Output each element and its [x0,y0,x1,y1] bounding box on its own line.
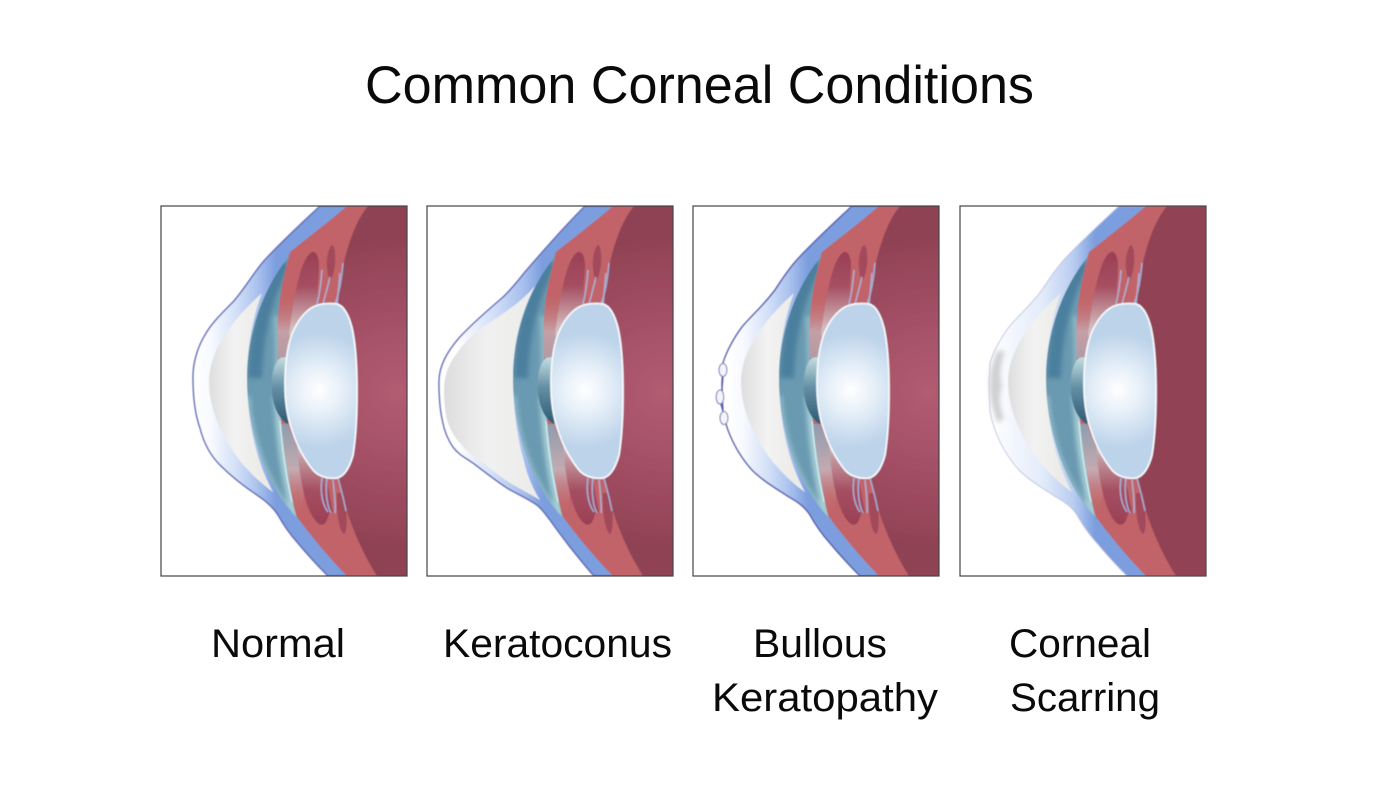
label: corneal scarring: Corneal [1009,622,1151,666]
iris, pupil and lens [247,245,357,534]
panel: corneal scarring [960,206,1206,576]
label: corneal scarring: Scarring [1010,676,1160,720]
label: normal: Normal [211,622,345,666]
corneal bullae [716,364,728,424]
anterior chamber [209,293,273,492]
anterior chamber [1008,293,1072,492]
panel: keratoconus [427,206,673,576]
label: corneal scarring [1009,622,1160,720]
bulged anterior chamber [444,286,540,500]
iris, pupil and lens [513,245,623,534]
corneal scar [990,350,1005,423]
label: bullous keratopathy [712,622,938,720]
posterior chamber [869,206,939,576]
iris, pupil and lens [1046,245,1156,534]
posterior chamber [1136,206,1206,576]
panel: normal cornea [161,206,407,576]
label: bullous keratopathy: Bullous [753,622,887,666]
panel: bullous keratopathy [693,206,939,576]
posterior chamber [603,206,673,576]
label: keratoconus: Keratoconus [443,622,672,666]
title: Common Corneal Conditions [365,56,1034,115]
cornea outline [722,206,939,576]
posterior chamber [337,206,407,576]
anterior chamber [741,293,805,492]
cone-shaped cornea outline [439,206,673,576]
pale cornea outline [988,206,1146,576]
label: bullous keratopathy: Keratopathy [712,676,938,720]
iris, pupil and lens [779,245,889,534]
cornea and sclera outline [193,206,407,576]
